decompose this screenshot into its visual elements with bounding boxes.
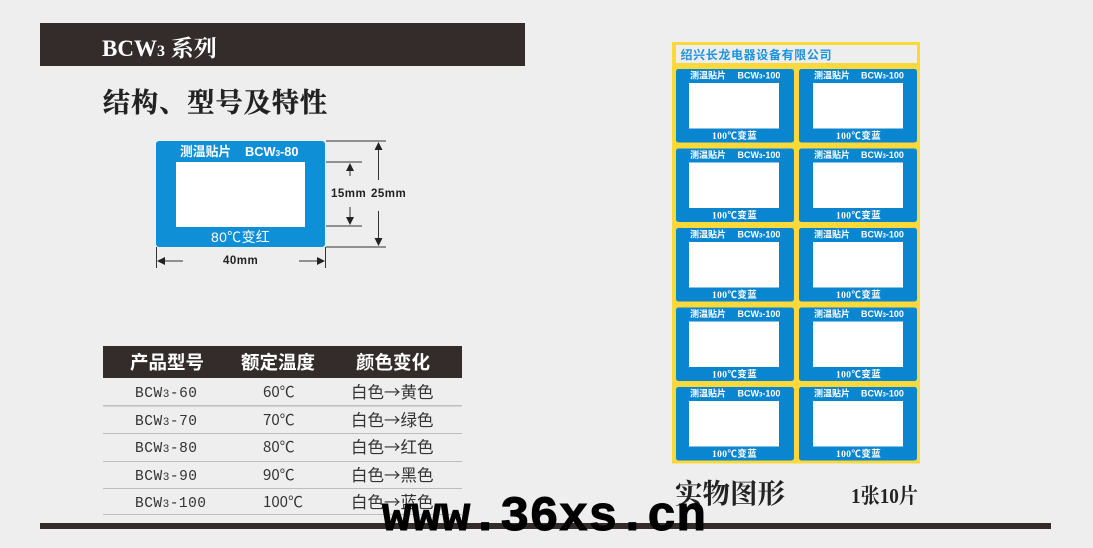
- row BCW3-100: 100℃: [263, 491, 303, 512]
- row BCW3-90: BCW3-90: [135, 469, 197, 485]
- label sample: [156, 141, 325, 247]
- sheet label 5: 100℃变蓝: [712, 289, 757, 301]
- caption: actual product: 实物图形: [675, 478, 785, 509]
- sheet label 6: 测温贴片: [814, 228, 850, 240]
- row BCW3-90: 90℃: [263, 464, 295, 485]
- sheet label 5: [676, 228, 794, 302]
- sheet label 4: [799, 148, 917, 222]
- row BCW3-80: 白色→红色: [351, 434, 434, 458]
- table header: 产品型号: [130, 352, 204, 373]
- sheet label 3: BCW3-100: [738, 150, 780, 160]
- row BCW3-100: BCW3-100: [135, 496, 206, 512]
- spec table: [103, 346, 462, 515]
- label sample: 测温贴片: [180, 144, 231, 159]
- sheet label 2: BCW3-100: [861, 70, 904, 80]
- sheet label 7: 测温贴片: [690, 308, 726, 319]
- sheet label 5: 测温贴片: [690, 228, 726, 240]
- diagram: label with dimensions: [156, 141, 406, 268]
- dimension: 25mm height: 25mm: [371, 188, 406, 200]
- row BCW3-100: [103, 489, 462, 515]
- sheet label 7: [676, 308, 794, 381]
- row BCW3-70: 70℃: [263, 409, 295, 430]
- sheet label 8: 测温贴片: [814, 308, 850, 319]
- sheet label 2: 测温贴片: [814, 70, 850, 80]
- label sample: BCW3-80: [245, 144, 299, 159]
- sheet label 9: 测温贴片: [690, 388, 726, 398]
- watermark: www.36xs.cn: [382, 489, 706, 545]
- sheet label 8: BCW3-100: [861, 309, 904, 319]
- sheet label 1: [676, 69, 794, 142]
- row BCW3-60: 白色→黄色: [351, 379, 434, 403]
- sheet label 2: 100℃变蓝: [836, 130, 881, 142]
- sheet label 1: BCW3-100: [738, 70, 780, 80]
- sheet label 4: 100℃变蓝: [836, 210, 881, 222]
- dimension: 15mm height: [326, 162, 366, 226]
- sheet label 5: BCW3-100: [738, 230, 780, 240]
- sheet label 6: BCW3-100: [861, 230, 904, 240]
- company name: [676, 45, 917, 63]
- row BCW3-80: [103, 434, 462, 462]
- sheet label 10: [799, 387, 917, 460]
- row BCW3-100: 白色→蓝色: [351, 489, 434, 513]
- row BCW3-90: 白色→黑色: [351, 462, 434, 486]
- sheet label 3: 100℃变蓝: [712, 210, 757, 222]
- company name: 绍兴长龙电器设备有限公司: [680, 47, 832, 62]
- dimension: 40mm width: 40mm: [223, 255, 258, 267]
- row BCW3-70: 白色→绿色: [351, 407, 434, 431]
- dimension: 15mm height: 15mm: [331, 188, 366, 200]
- sheet label 9: 100℃变蓝: [712, 448, 757, 460]
- sheet label 4: 测温贴片: [814, 149, 850, 160]
- sheet label 8: 100℃变蓝: [836, 368, 881, 380]
- table header: 颜色变化: [356, 352, 430, 373]
- row BCW3-60: [103, 379, 462, 406]
- sheet label 6: [799, 228, 917, 302]
- sheet label 10: BCW3-100: [861, 388, 904, 398]
- sheet label 4: BCW3-100: [861, 150, 904, 160]
- sheet label 3: [676, 148, 794, 222]
- sheet label 10: 100℃变蓝: [836, 448, 881, 460]
- sheet label 7: BCW3-100: [738, 309, 780, 319]
- sheet label 1: 100℃变蓝: [712, 130, 757, 142]
- table header: 额定温度: [241, 352, 315, 373]
- label sample: 80℃变红: [211, 229, 270, 245]
- row BCW3-80: BCW3-80: [135, 441, 197, 457]
- section heading: 结构、型号及特性: [103, 87, 327, 118]
- sheet label 9: BCW3-100: [738, 388, 780, 398]
- row BCW3-60: BCW3-60: [135, 386, 197, 402]
- row BCW3-70: [103, 407, 462, 434]
- header bar: [40, 23, 525, 66]
- footer bar: [40, 523, 1051, 529]
- row BCW3-60: 60℃: [263, 381, 295, 402]
- dimension: 40mm width: [156, 247, 326, 268]
- sheet label 6: 100℃变蓝: [836, 289, 881, 301]
- caption: quantity per sheet: 1张10片: [851, 484, 918, 508]
- row BCW3-80: 80℃: [263, 436, 295, 457]
- sheet label 8: [799, 308, 917, 381]
- label sheet: [672, 42, 920, 464]
- sheet label 10: 测温贴片: [814, 388, 850, 398]
- dimension: 25mm height: [326, 141, 406, 247]
- sheet label 7: 100℃变蓝: [712, 368, 757, 380]
- row BCW3-90: [103, 462, 462, 489]
- series title: BCW3 系列: [102, 36, 217, 61]
- sheet label 1: 测温贴片: [690, 70, 726, 80]
- row BCW3-70: BCW3-70: [135, 414, 197, 430]
- sheet label 9: [676, 387, 794, 460]
- sheet label 2: [799, 69, 917, 142]
- table header: [103, 346, 462, 378]
- sheet label 3: 测温贴片: [690, 149, 726, 160]
